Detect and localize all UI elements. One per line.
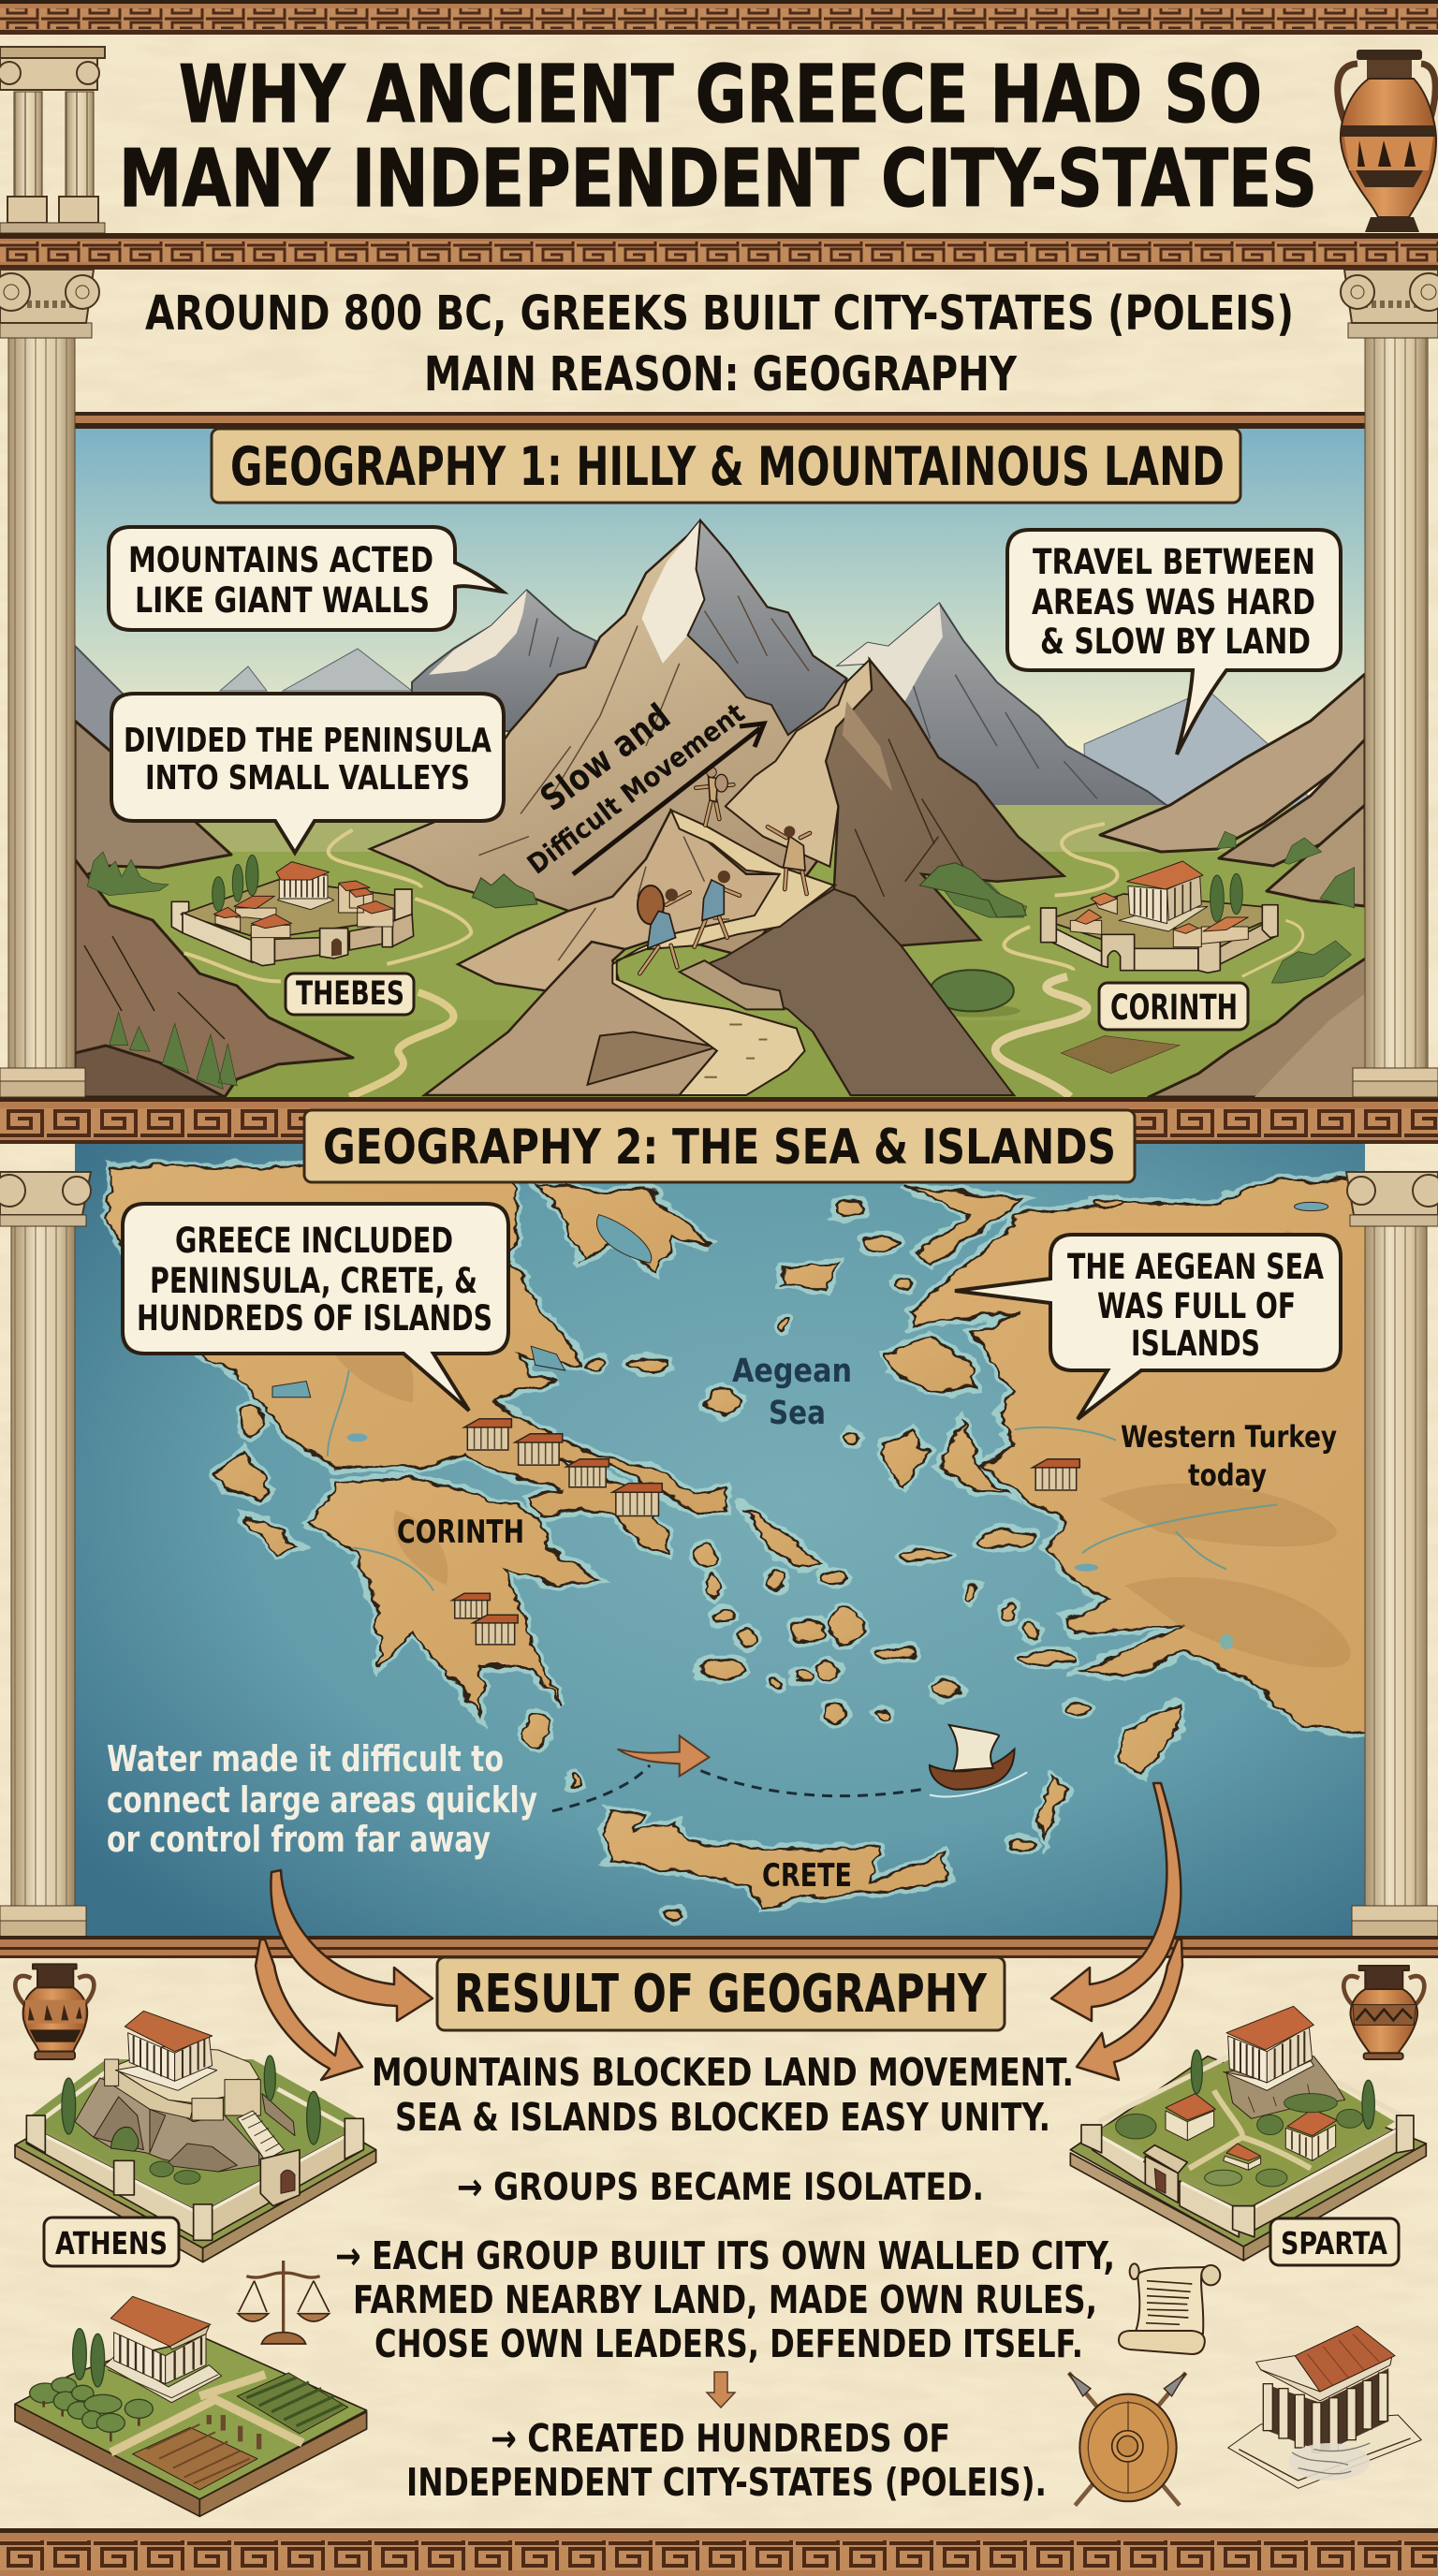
text block: result explanation: MOUNTAINS BLOCKED LAND MOVEMENT. [372,2050,1074,2095]
text block: water made it difficult: Water made it difficult to [107,1738,504,1779]
label: Corinth on map: CORINTH [397,1514,524,1551]
mountain landscape scene [75,429,1367,1097]
city block: Athens acropolis and left vase [15,1964,376,2262]
label: Western Turkey today: Western Turkey [1121,1419,1337,1455]
label: Sparta: SPARTA [1281,2225,1387,2261]
text block: result explanation [335,2050,1115,2505]
label: Athens: ATHENS [55,2225,168,2261]
callout: Aegean sea full of islands [955,1235,1341,1419]
title [119,49,1317,226]
callout: Greece included: PENINSULA, CRETE, & [150,1261,477,1301]
central mountains [370,520,1064,1095]
text block: water made it difficult: or control from far away [107,1819,491,1860]
callout: Aegean sea full of islands: ISLANDS [1131,1324,1260,1364]
callout: travel between areas: AREAS WAS HARD [1032,582,1315,622]
label: Western Turkey today [1121,1419,1337,1493]
band between panels [0,1097,1438,1144]
label: Thebes: THEBES [296,975,404,1013]
callout: travel between areas [1007,530,1341,754]
map of the Aegean [75,1144,1379,1936]
side mountains [75,674,1367,1097]
label: slow and difficult movement with arrow: Difficult Movement [521,696,751,881]
icon: scales of justice [238,2261,330,2344]
label: Crete: CRETE [762,1857,852,1895]
callout: Greece included: GREECE INCLUDED [175,1221,453,1261]
icons: scroll, shield and bottom right temple [1069,2263,1421,2506]
label: Corinth [1099,983,1248,1030]
callout: divided the peninsula: DIVIDED THE PENINSULA [124,722,492,760]
heading: result of geography: RESULT OF GEOGRAPHY [454,1964,988,2025]
icon: left vase [15,1964,94,2059]
callout: travel between areas: & SLOW BY LAND [1040,622,1311,662]
curved arrows from map into result [256,1783,1182,2080]
frame strip above panel 1 [73,412,1367,429]
icon: sailing ship [930,1725,1027,1796]
column: lower left [0,1172,91,1938]
second greek key border [0,233,1438,270]
subtitle [145,286,1294,402]
icon: scroll [1119,2263,1220,2354]
Corinth valley roads, trees and town [933,824,1355,1097]
top greek key border [0,0,1438,35]
callout: divided the peninsula [111,694,504,853]
column: lower right [1346,1172,1438,1938]
callout: divided the peninsula: INTO SMALL VALLEYS [145,759,470,798]
subtitle: MAIN REASON: GEOGRAPHY [424,347,1018,402]
callout: Greece included: HUNDREDS OF ISLANDS [137,1298,492,1339]
label: slow and difficult movement with arrow: Slow and [533,695,678,819]
text block: result explanation: CHOSE OWN LEADERS, DEFENDED ITSELF. [374,2321,1083,2366]
city block: farm with temple and scales [15,2261,367,2516]
distant ranges [75,646,1320,819]
text block: result explanation: → EACH GROUP BUILT ITS OWN WALLED CITY, [335,2233,1115,2278]
label: Athens [44,2217,179,2266]
panel: geography 1 mountains [75,429,1367,1097]
callout: Aegean sea full of islands: THE AEGEAN SEA [1067,1247,1324,1287]
label: Sparta [1270,2218,1399,2265]
far peaks [412,590,1183,817]
column: upper right [1341,270,1438,1097]
label: Aegean Sea [732,1353,852,1432]
label: Western Turkey today: today [1188,1457,1267,1493]
dashed sailing route and arrow [552,1735,921,1811]
column: upper left [0,270,99,1097]
callout: Aegean sea full of islands: WAS FULL OF [1097,1286,1296,1326]
text block: result explanation: → CREATED HUNDREDS OF [491,2416,950,2461]
heading: geography 2: GEOGRAPHY 2: THE SEA & ISLANDS [323,1120,1116,1176]
callout: mountains acted like giant walls: LIKE GIANT WALLS [135,580,430,621]
text block: water made it difficult: connect large areas quickly [107,1779,537,1821]
heading: result of geography [437,1957,1005,2030]
city block: Sparta and right vase [1070,1966,1426,2261]
panel: result of geography [15,1783,1426,2516]
text block: result explanation: SEA & ISLANDS BLOCKED EASY UNITY. [395,2095,1050,2140]
travellers on the path [638,768,810,973]
label: Corinth: CORINTH [1110,988,1238,1028]
Thebes valley roads, trees and town [87,830,506,1097]
callout: mountains acted like giant walls [109,527,503,630]
icon: greek vase at title right [1338,50,1436,232]
icon: temple lower right [1228,2326,1421,2488]
text block: water made it difficult [107,1738,537,1860]
text block: result explanation: → GROUPS BECAME ISOLATED. [457,2166,984,2209]
icon: twin columns at title left [0,47,105,233]
callout: Greece included [123,1204,508,1411]
text block: result explanation: INDEPENDENT CITY-STATES (POLEIS). [406,2460,1047,2505]
panel: geography 2 sea and islands map [75,1144,1379,1936]
heading: geography 2 [304,1110,1135,1182]
text block: result explanation: FARMED NEARBY LAND, MADE OWN RULES, [353,2277,1097,2322]
arrow: small down arrow [707,2372,735,2408]
label: Aegean Sea: Sea [769,1395,826,1432]
callout: mountains acted like giant walls: MOUNTAINS ACTED [128,540,433,580]
bottom greek key border [0,2528,1438,2576]
callout: travel between areas: TRAVEL BETWEEN [1033,542,1315,582]
icon: right vase [1343,1966,1424,2059]
label: Aegean Sea: Aegean [732,1353,852,1390]
band below map [0,1936,1438,1958]
icon: shield and spears [1069,2373,1186,2506]
